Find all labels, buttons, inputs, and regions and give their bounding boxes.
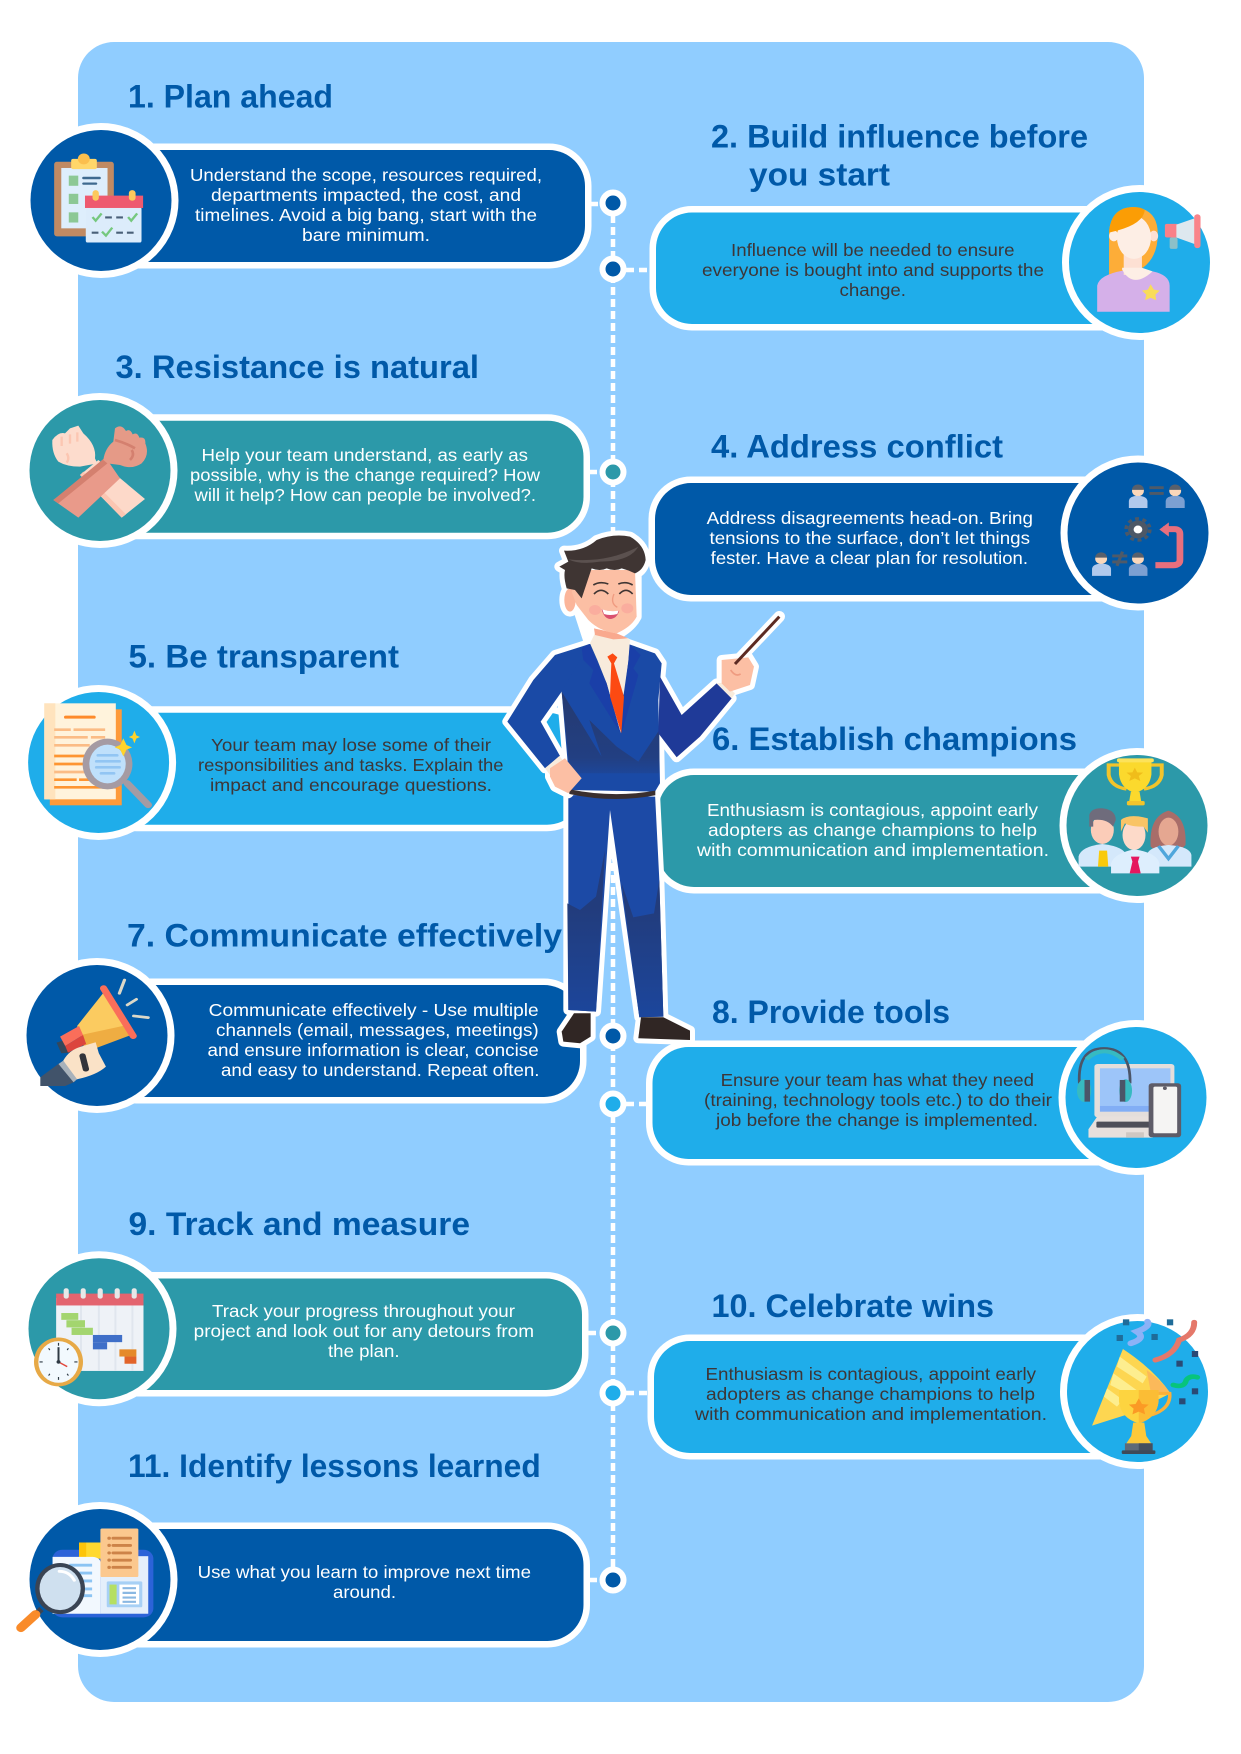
panel: step 6 establish champions	[658, 721, 1208, 896]
pill 11	[100, 1529, 584, 1641]
body text 9: the plan.	[328, 1341, 400, 1361]
body text 7: Communicate effectively - Use multiple	[209, 1000, 539, 1020]
body text 2: Influence will be needed to ensure	[731, 240, 1014, 260]
panel: step 7 communicate effectively	[26, 918, 580, 1106]
circle 5	[28, 692, 169, 833]
body text 8: Ensure your team has what they need	[721, 1070, 1034, 1090]
panel: step 10 celebrate wins	[654, 1288, 1208, 1462]
heading 1: 1. Plan ahead	[128, 78, 333, 114]
body text 2: everyone is bought into and supports the	[702, 260, 1044, 280]
heading 7: 7. Communicate effectively	[127, 918, 562, 954]
character lower body	[562, 793, 690, 1043]
trousers	[567, 793, 663, 1017]
icon: files and magnifier	[21, 1528, 153, 1628]
body text 1	[190, 165, 542, 245]
heading 5: 5. Be transparent	[128, 639, 399, 675]
panel: step 9 track and measure	[28, 1206, 582, 1399]
pill 7	[100, 985, 580, 1097]
heading 4: 4. Address conflict	[711, 428, 1003, 464]
panel: step 3 resistance is natural	[30, 349, 584, 541]
body text 9	[194, 1301, 534, 1361]
body text 6	[696, 800, 1049, 860]
body text 10: Enthusiasm is contagious, appoint early	[706, 1364, 1036, 1384]
pill 6	[658, 775, 1138, 887]
circle 9	[28, 1258, 170, 1399]
body text 6: adopters as change champions to help	[708, 820, 1037, 840]
heading 2	[711, 118, 1088, 192]
heading 8: 8. Provide tools	[712, 994, 950, 1030]
body text 3	[190, 445, 540, 505]
icon: trophy and team	[1079, 758, 1191, 873]
panel: step 2 build influence	[656, 118, 1210, 333]
body text 8: job before the change is implemented.	[715, 1110, 1038, 1130]
body text 4: tensions to the surface, don’t let things	[710, 528, 1030, 548]
body text 9: project and look out for any detours from	[194, 1321, 534, 1341]
pill 5	[100, 713, 583, 825]
body text 7	[208, 1000, 540, 1080]
timeline spine	[588, 192, 650, 1590]
panel: step 8 provide tools	[652, 994, 1206, 1168]
body text 6: with communication and implementation.	[696, 840, 1049, 860]
heading 2: 2. Build influence before	[711, 118, 1088, 154]
circle 6	[1066, 755, 1208, 896]
shoes	[562, 1013, 690, 1043]
icon: gantt calendar and clock	[34, 1288, 143, 1386]
body text 11	[198, 1562, 531, 1602]
pill 4	[655, 483, 1139, 595]
pill 10	[654, 1341, 1138, 1453]
circle 8	[1066, 1027, 1206, 1168]
body text 4: fester. Have a clear plan for resolution.	[711, 548, 1028, 568]
panel: step 11 identify lessons learned	[21, 1448, 583, 1650]
character upper body	[507, 536, 779, 799]
body text 11: around.	[333, 1582, 396, 1602]
body text 2	[702, 240, 1044, 300]
panel: step 5 be transparent	[28, 638, 583, 833]
body text 8: (training, technology tools etc.) to do their	[704, 1090, 1052, 1110]
pill 9	[100, 1278, 582, 1390]
icon: clipboard and calendar	[54, 153, 143, 243]
body text 8	[704, 1070, 1052, 1130]
body text 11: Use what you learn to improve next time	[198, 1562, 531, 1582]
body text 3: possible, why is the change required? How	[190, 465, 540, 485]
heading 10: 10. Celebrate wins	[712, 1288, 994, 1324]
body text 4: Address disagreements head-on. Bring	[707, 508, 1033, 528]
circle 3	[30, 400, 170, 541]
head and hair	[559, 536, 646, 639]
circle 11	[30, 1509, 170, 1650]
pill 2	[656, 212, 1140, 324]
body text 5: responsibilities and tasks. Explain the	[198, 755, 504, 775]
heading 3: 3. Resistance is natural	[116, 349, 479, 385]
body text 1: timelines. Avoid a big bang, start with the	[195, 205, 537, 225]
heading 2: you start	[749, 156, 890, 192]
body text 3: will it help? How can people be involved?.	[193, 485, 536, 505]
body text 7: channels (email, messages, meetings)	[216, 1020, 539, 1040]
icon: party hat and trophy	[1092, 1319, 1198, 1454]
heading 6: 6. Establish champions	[712, 721, 1077, 757]
body text 7: and easy to understand. Repeat often.	[221, 1060, 540, 1080]
hands and pointer	[545, 617, 779, 793]
circle 10	[1067, 1321, 1208, 1462]
body text 4	[707, 508, 1033, 568]
icon: crossed arms	[52, 426, 147, 518]
body text 1: bare minimum.	[302, 225, 430, 245]
pill 3	[100, 421, 584, 533]
body text 7: and ensure information is clear, concise	[208, 1040, 539, 1060]
heading 11: 11. Identify lessons learned	[128, 1448, 541, 1484]
body text 10	[694, 1364, 1047, 1424]
body text 2: change.	[840, 280, 906, 300]
circle 1	[30, 130, 172, 271]
necktie	[607, 653, 624, 733]
body text 9: Track your progress throughout your	[212, 1301, 515, 1321]
body text 10: adopters as change champions to help	[706, 1384, 1035, 1404]
body text 10: with communication and implementation.	[694, 1404, 1047, 1424]
icon: conflict resolution people and gear	[1092, 484, 1185, 576]
body text 5: impact and encourage questions.	[210, 775, 492, 795]
body text 3: Help your team understand, as early as	[202, 445, 528, 465]
icon: woman with megaphone	[1097, 207, 1201, 312]
belt	[569, 789, 655, 799]
panel: step 1 plan ahead	[30, 78, 585, 271]
icon: megaphone in hand	[40, 980, 148, 1086]
panel: step 4 address conflict	[655, 428, 1208, 604]
icon: laptop, phone and headset	[1077, 1048, 1181, 1138]
jacket	[507, 633, 732, 792]
heading 9: 9. Track and measure	[128, 1206, 470, 1242]
icon: document and magnifier	[44, 703, 148, 805]
body text 5	[198, 735, 504, 795]
circle 4	[1068, 462, 1208, 604]
body text 5: Your team may lose some of their	[211, 735, 491, 755]
body text 6: Enthusiasm is contagious, appoint early	[707, 800, 1038, 820]
circle 7	[26, 965, 168, 1106]
body text 1: departments impacted, the cost, and	[211, 185, 521, 205]
circle 2	[1069, 192, 1210, 333]
pill 8	[652, 1047, 1136, 1159]
presenter character with pointer	[507, 536, 779, 1043]
body text 1: Understand the scope, resources required,	[190, 165, 542, 185]
pill 1	[100, 150, 585, 262]
